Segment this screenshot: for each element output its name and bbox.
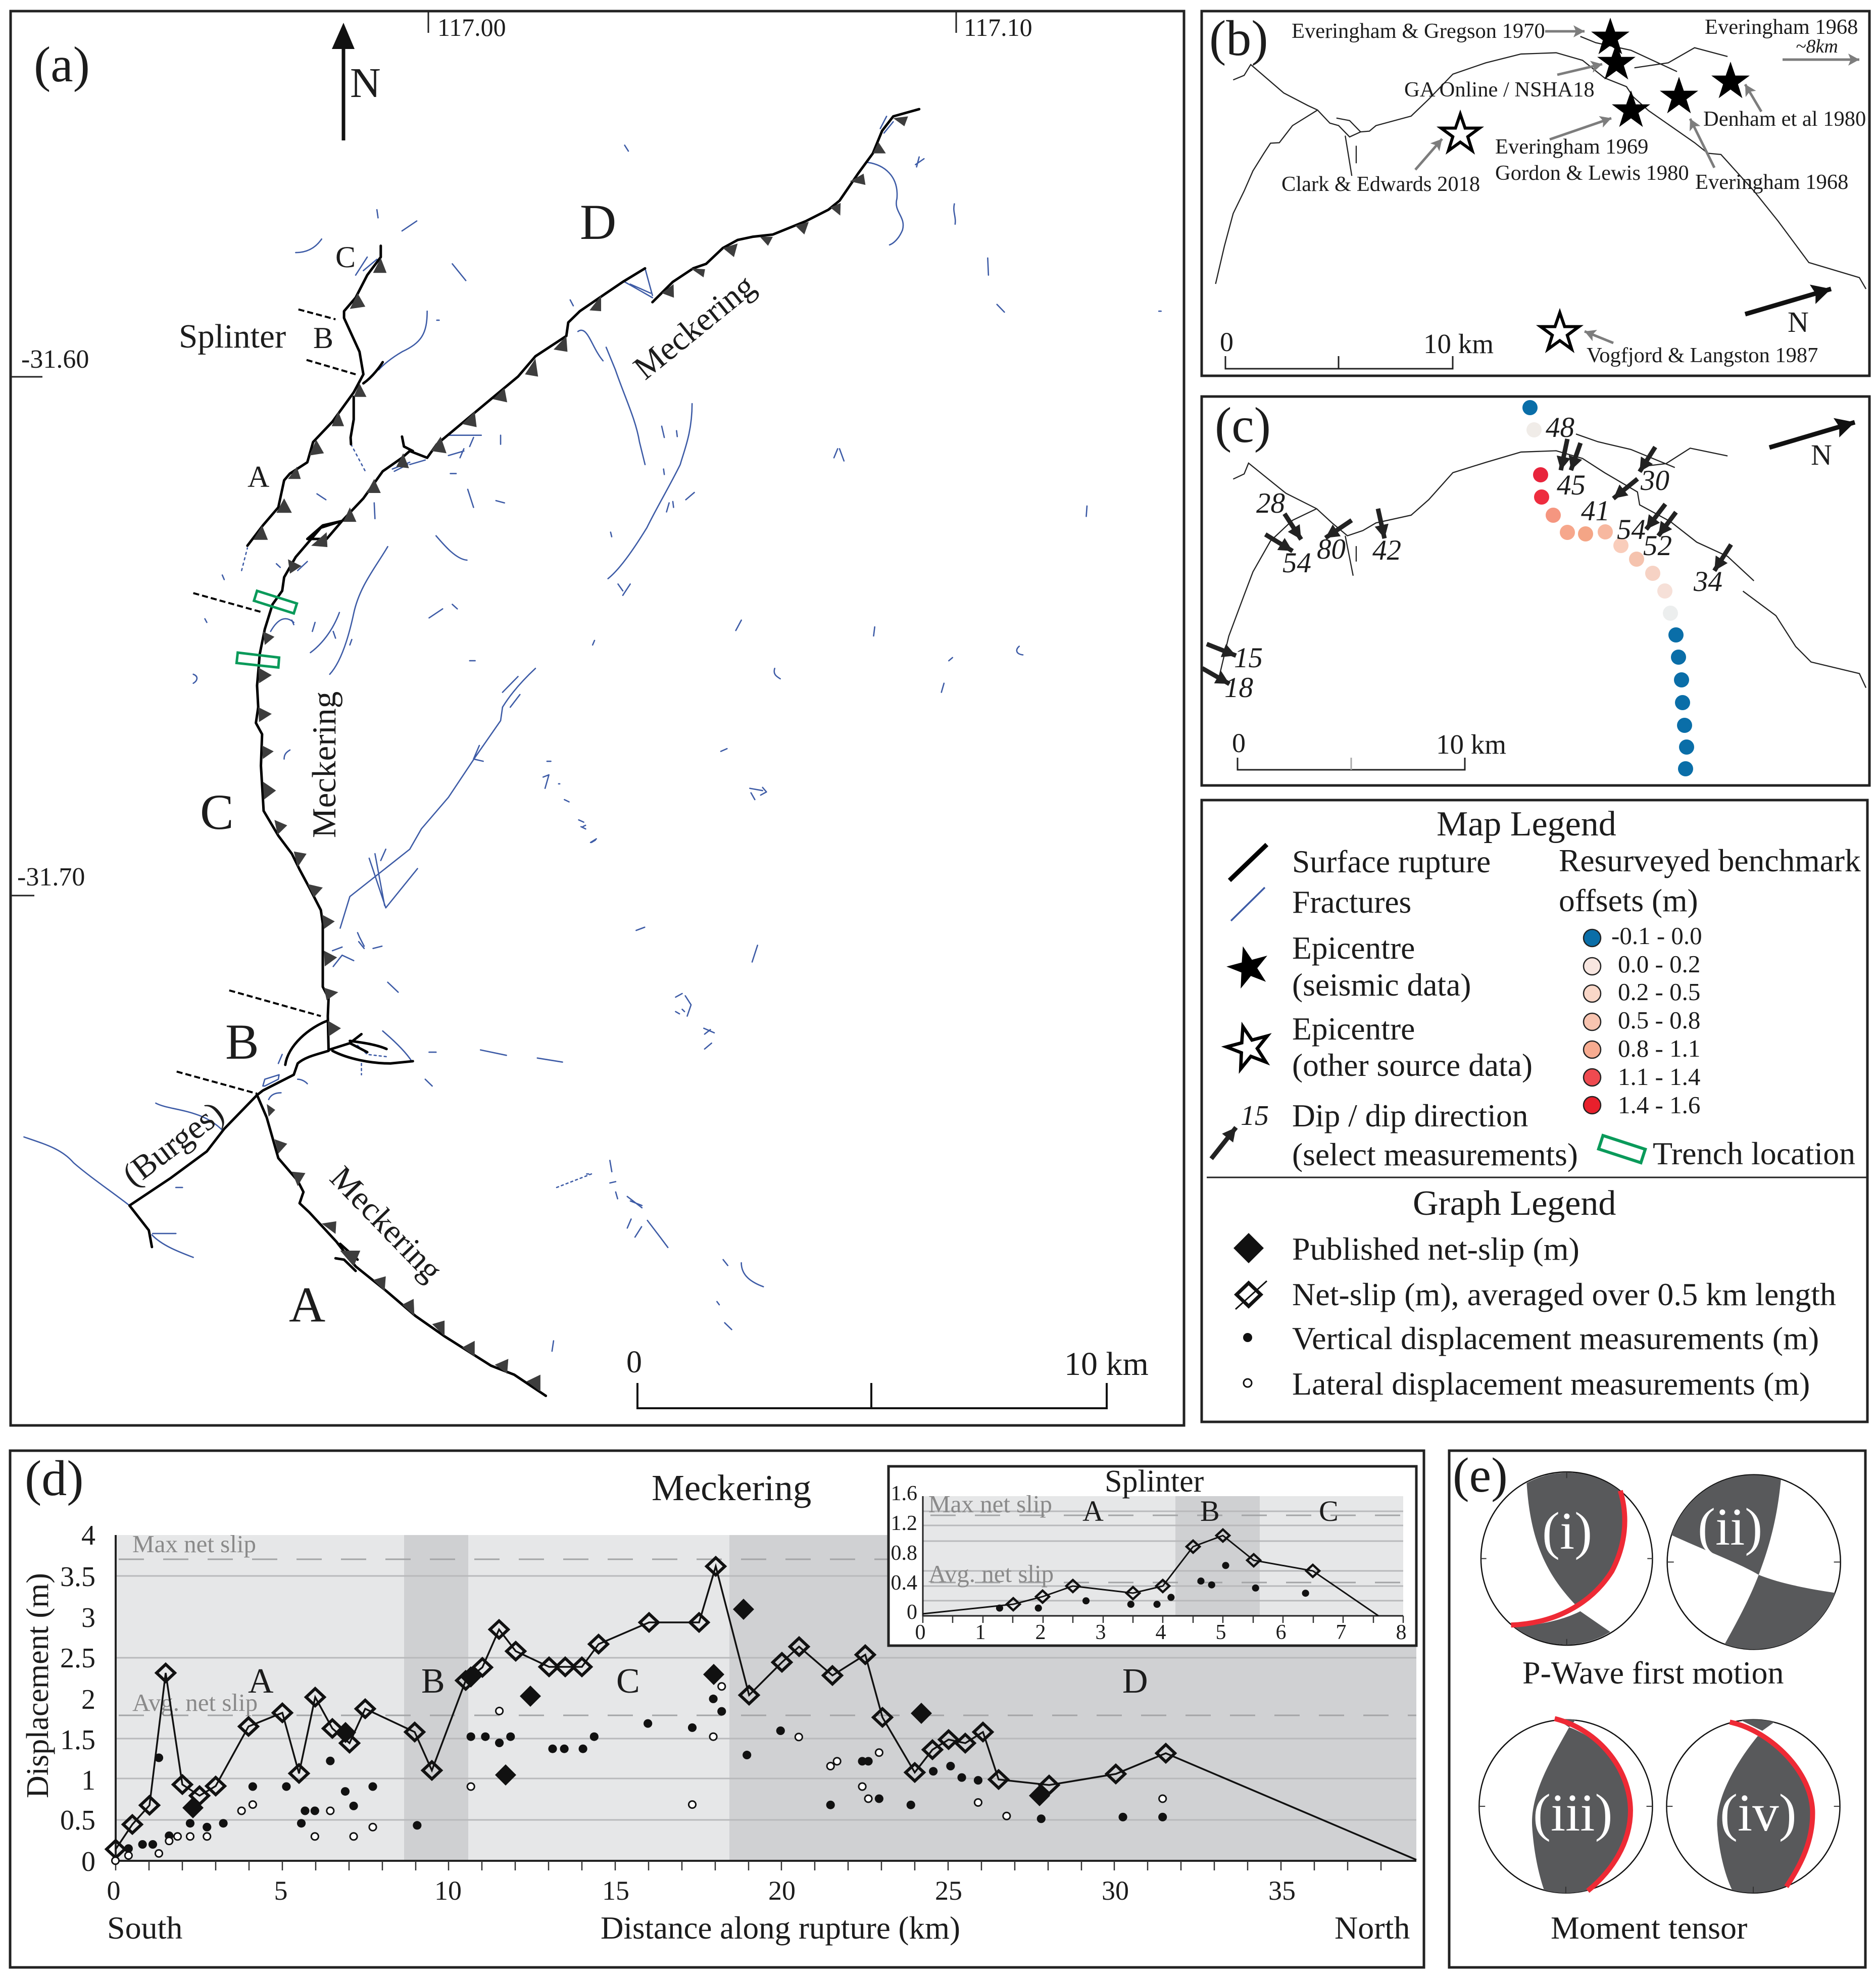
y axis tick labels: 0: [81, 1846, 95, 1877]
legend: other source epicentre: (other source data): [1292, 1047, 1533, 1083]
inset tick labels: 0.4: [891, 1571, 917, 1595]
dip values: [1224, 412, 1722, 704]
source labels: Everingham 1969: [1495, 135, 1648, 159]
inset tick labels: 4: [1156, 1621, 1166, 1644]
x axis tick labels: 30: [1102, 1875, 1129, 1906]
chart title: Meckering: Meckering: [652, 1467, 811, 1508]
caption: Moment tensor: Moment tensor: [1551, 1910, 1747, 1946]
inset reference labels: Max net slip: [928, 1490, 1052, 1518]
label: Meckering C: Meckering: [306, 691, 343, 838]
source labels: Clark & Edwards 2018: [1281, 172, 1480, 196]
x axis tick labels: 15: [602, 1875, 629, 1906]
legend: benchmark offsets: [1559, 843, 1861, 1119]
dip values: 52: [1643, 530, 1672, 562]
map coordinates: 117.00: [437, 13, 506, 41]
segment labels: C: [200, 784, 234, 840]
inset segment letters: B: [1200, 1495, 1220, 1527]
icon: north arrow: N: [350, 60, 381, 107]
segment letters: C: [616, 1662, 640, 1701]
map coordinates: -31.60: [21, 345, 89, 374]
beachball (i): (i): [1542, 1501, 1592, 1560]
y axis tick labels: 2.5: [60, 1643, 95, 1674]
heading: Map Legend: Map Legend: [1437, 805, 1616, 844]
map labels: A: [248, 460, 269, 493]
y axis tick labels: 2: [81, 1684, 95, 1715]
legend: averaged net-slip: Net-slip (m), averaged over 0.5 km length: [1292, 1276, 1836, 1312]
scale bar: [1232, 728, 1506, 770]
scale bar: [1220, 327, 1494, 369]
legend: benchmark offsets: 1.1 - 1.4: [1618, 1063, 1700, 1091]
inset background bands: [923, 1496, 1403, 1616]
x axis tick labels: [107, 1875, 1296, 1906]
dip values: 54: [1282, 547, 1311, 579]
dip values: 28: [1256, 487, 1285, 519]
dip values: 41: [1581, 495, 1610, 527]
dip values: 80: [1317, 533, 1346, 565]
inset tick labels: 8: [1396, 1621, 1406, 1644]
trench locations: [236, 591, 297, 667]
reference labels: Max net slip: [132, 1530, 256, 1558]
panel: (d) displacement chart: [10, 1450, 1424, 1967]
map coordinates: -31.70: [17, 863, 85, 892]
legend: fractures: [1231, 884, 1411, 921]
inset segment letters: [1082, 1495, 1339, 1527]
label: Burges: (Burges): [116, 1094, 231, 1194]
dip values: 54: [1617, 514, 1646, 546]
panel: legends: [1202, 800, 1867, 1422]
scale bar: [626, 1345, 1149, 1408]
x axis tick labels: 10: [434, 1875, 462, 1906]
inset tick labels: 5: [1215, 1621, 1226, 1644]
vertical displacement points: [128, 1699, 1163, 1849]
fractures: north-west sheet: [193, 210, 603, 707]
source labels: [1281, 15, 1866, 367]
x axis labels: [107, 1910, 1410, 1946]
inset tick labels: 0: [915, 1621, 925, 1644]
dip values: 48: [1546, 412, 1574, 443]
icon: seismic epicentres: [1591, 18, 1750, 127]
panel: (b) epicentres: [1202, 10, 1869, 376]
y axis tick labels: [60, 1520, 95, 1877]
source labels: Denham et al 1980: [1703, 107, 1866, 131]
north arrow: [1769, 422, 1855, 471]
segment labels: A: [289, 1276, 325, 1332]
y axis tick labels: 0.5: [60, 1805, 95, 1836]
x axis labels: Distance along rupture (km): [601, 1910, 960, 1946]
lateral displacement points: [115, 1687, 1163, 1861]
inset title: Splinter: [1105, 1464, 1204, 1499]
x axis tick labels: 5: [274, 1875, 288, 1906]
source labels: Gordon & Lewis 1980: [1495, 161, 1689, 185]
beachball (iv): (iv): [1720, 1783, 1797, 1842]
legend: benchmark offsets: offsets (m): [1559, 882, 1698, 918]
dip values: 34: [1693, 566, 1722, 598]
beachball (ii): (ii): [1698, 1497, 1762, 1556]
panel: (e) focal mechanisms: [1449, 1448, 1865, 1967]
legend: published net-slip: Published net-slip (m): [1292, 1231, 1579, 1267]
scale bar: 10 km: [1436, 729, 1506, 760]
heading: (d): (d): [25, 1450, 84, 1506]
x axis labels: South: [107, 1910, 182, 1946]
map labels: Splinter: [179, 318, 286, 355]
inset tick labels: 6: [1276, 1621, 1286, 1644]
y axis tick labels: 3: [81, 1602, 95, 1634]
inset tick labels: 0: [907, 1601, 917, 1624]
scale bar: 0: [626, 1345, 642, 1379]
y axis title: Displacement (m): [21, 1573, 55, 1798]
segment letters: A: [248, 1662, 274, 1701]
inset tick labels: 3: [1095, 1621, 1106, 1644]
legend: benchmark offsets: 0.5 - 0.8: [1618, 1006, 1700, 1034]
inset tick labels: 2: [1035, 1621, 1046, 1644]
caption: P-Wave first motion: P-Wave first motion: [1522, 1655, 1784, 1691]
heading: (b): (b): [1209, 10, 1268, 66]
inset tick labels: 1: [975, 1621, 986, 1644]
dip values: 18: [1224, 672, 1253, 704]
surface rupture: Meckering C, B, A and Burges: [129, 707, 546, 1396]
legend: benchmark offsets: -0.1 - 0.0: [1611, 922, 1702, 950]
label: Meckering D: Meckering: [626, 267, 762, 387]
axes: [116, 1535, 1416, 1870]
legend: seismic epicentre: (seismic data): [1292, 967, 1471, 1003]
icon: north arrow: [332, 23, 381, 140]
x axis tick labels: 35: [1268, 1875, 1296, 1906]
legend: dip direction: [1211, 1098, 1578, 1172]
segment letters: B: [421, 1662, 445, 1701]
published net-slip diamonds: [182, 1599, 1050, 1818]
inset net-slip series: [923, 1536, 1378, 1616]
legend: benchmark offsets: 0.0 - 0.2: [1618, 950, 1700, 978]
inset chart: Splinter: [888, 1464, 1416, 1646]
north arrow: [1745, 289, 1831, 338]
legend: seismic epicentre: [1222, 930, 1471, 1003]
panel: (c) benchmarks and dips: [1202, 397, 1869, 785]
beachball (iii): [1479, 1719, 1652, 1893]
legend: benchmark offsets: 0.2 - 0.5: [1618, 978, 1700, 1006]
inset axes: [923, 1496, 1403, 1623]
inset tick labels: [891, 1482, 1406, 1644]
legend: trench location: Trench location: [1653, 1135, 1855, 1171]
inset reference labels: Avg. net slip: [928, 1560, 1054, 1588]
fractures: north-east sheet: [606, 116, 1161, 693]
reference labels: [132, 1530, 258, 1716]
dip values: 45: [1557, 469, 1586, 501]
beachball (iii): (iii): [1533, 1783, 1612, 1842]
fractures: south-east sheet: [583, 749, 766, 1329]
legend: seismic epicentre: Epicentre: [1292, 930, 1415, 966]
scale bar: 0: [1220, 327, 1233, 357]
scale bar: 10 km: [1423, 328, 1494, 359]
scale bar: 0: [1232, 728, 1246, 758]
segment labels: B: [225, 1014, 259, 1070]
legend: other source epicentre: Epicentre: [1292, 1011, 1415, 1047]
grey source arrows: [1415, 31, 1859, 343]
legend: benchmark offsets: Resurveyed benchmark: [1559, 843, 1861, 878]
source labels: ~8km: [1796, 36, 1838, 57]
inset tick labels: 0.8: [891, 1542, 917, 1565]
label: Meckering A: Meckering: [323, 1159, 450, 1289]
net-slip series: [116, 1566, 1416, 1860]
surface rupture: Meckering D north: [606, 109, 919, 302]
x axis tick labels: 25: [935, 1875, 962, 1906]
panel: (a) fault map: [11, 11, 1184, 1425]
map labels: C: [335, 240, 356, 274]
reference labels: Avg. net slip: [132, 1689, 258, 1716]
chart background bands: [116, 1535, 1416, 1861]
rupture trace: [1218, 434, 1866, 688]
map labels: [179, 240, 356, 493]
north arrow: N: [1788, 306, 1809, 338]
surface rupture: Splinter and Meckering D: [193, 246, 606, 707]
scale bar: 10 km: [1064, 1346, 1149, 1382]
y axis tick labels: 3.5: [60, 1561, 95, 1593]
segment letters: D: [1122, 1662, 1148, 1701]
heading: Graph Legend: Graph Legend: [1413, 1184, 1616, 1223]
inset tick labels: 1.6: [891, 1482, 917, 1505]
dip arrows: [1202, 439, 1731, 684]
source labels: Everingham & Gregson 1970: [1292, 19, 1545, 43]
segment labels: D: [580, 194, 616, 250]
source labels: Vogfjord & Langston 1987: [1587, 343, 1818, 367]
dip values: 42: [1372, 534, 1401, 566]
dip values: 30: [1640, 465, 1669, 497]
x axis labels: North: [1335, 1910, 1410, 1946]
heading: (e): (e): [1453, 1448, 1508, 1503]
segment labels: [200, 194, 616, 1332]
x axis tick labels: 20: [768, 1875, 796, 1906]
inset segment letters: A: [1082, 1495, 1104, 1527]
beachball (ii): [1667, 1475, 1841, 1649]
benchmark offset dots: [1522, 400, 1694, 776]
legend: dip direction: Dip / dip direction: [1292, 1098, 1528, 1133]
dip values: 15: [1234, 642, 1263, 674]
x axis tick labels: 0: [107, 1875, 120, 1906]
icon: other-source epicentres: [1441, 114, 1579, 349]
y axis tick labels: 1.5: [60, 1724, 95, 1756]
y axis tick labels: 4: [81, 1520, 95, 1551]
map coordinates: 117.10: [964, 13, 1032, 41]
source labels: GA Online / NSHA18: [1404, 78, 1595, 102]
inset segment letters: C: [1319, 1495, 1339, 1527]
legend: dip direction: 15: [1241, 1100, 1269, 1131]
legend: lateral displacement: Lateral displacement measurements (m): [1292, 1366, 1810, 1402]
rupture trace: [1216, 36, 1866, 289]
legend: fractures: Fractures: [1292, 884, 1411, 920]
legend: vertical displacement: Vertical displacement measurements (m): [1292, 1320, 1819, 1356]
legend: surface rupture: Surface rupture: [1292, 844, 1491, 879]
legend: other source epicentre: [1222, 1011, 1533, 1083]
segment letters: [248, 1662, 1148, 1701]
inset tick labels: 7: [1336, 1621, 1347, 1644]
inset reference labels: [928, 1490, 1054, 1588]
source labels: Everingham 1968: [1695, 170, 1848, 194]
fractures: south-west sheet: [24, 707, 596, 1351]
inset tick labels: 1.2: [891, 1512, 917, 1535]
heading: (a): (a): [34, 36, 90, 92]
map coordinates: [11, 11, 1032, 896]
heading: (c): (c): [1215, 397, 1271, 453]
north arrow: N: [1811, 438, 1832, 471]
y axis tick labels: 1: [81, 1765, 95, 1796]
map labels: B: [313, 321, 333, 355]
legend: benchmark offsets: 1.4 - 1.6: [1618, 1091, 1700, 1119]
legend: benchmark offsets: 0.8 - 1.1: [1618, 1034, 1700, 1062]
beachball (i): [1481, 1472, 1653, 1645]
source labels: Everingham 1968: [1705, 15, 1858, 39]
inset vertical displacement points: [1000, 1565, 1306, 1608]
legend: dip direction: (select measurements): [1292, 1136, 1578, 1172]
beachball (iv): [1666, 1719, 1840, 1893]
